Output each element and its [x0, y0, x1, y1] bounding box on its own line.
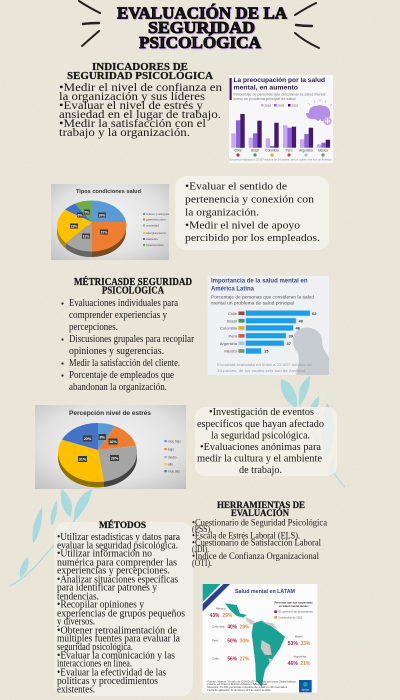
text block: indicadores: trabajo y la organización.	[59, 127, 190, 139]
methods list: tendencias.	[57, 591, 99, 602]
pie legend: muy alto	[168, 470, 180, 474]
country data: México	[216, 607, 226, 611]
horizontal bars	[246, 310, 310, 354]
country labels	[234, 148, 328, 152]
values	[264, 311, 317, 354]
methods list: •Recopilar opiniones y	[57, 600, 144, 611]
values: 49	[298, 318, 304, 323]
bars	[231, 114, 330, 148]
pie legend: reflexo y alergias	[146, 212, 170, 216]
methods list: para identificar patrones y	[57, 583, 157, 594]
methods list: •Evaluar la efectividad de las	[57, 667, 166, 678]
footnote	[217, 362, 313, 373]
panel: investigación y evaluaciones: medir la cultura y el ambiente	[197, 454, 322, 464]
country data: 29%	[240, 625, 250, 631]
chart title: Importancia de la salud mental en	[211, 278, 308, 284]
decorative brush rays, left	[79, 1, 100, 46]
bullet list: métricas: Medir la satisfacción del cliente.	[69, 358, 180, 369]
country labels: Chile	[234, 148, 242, 152]
pie chart: tipos condiciones salud	[51, 184, 170, 260]
chart subtitle: Porcentaje de personas que consideran la salud	[211, 295, 314, 300]
methods list: numérica para comprender las	[57, 557, 177, 568]
values: 15	[264, 348, 269, 354]
text block: indicadores: •Evaluar el nivel de estrés y	[59, 100, 203, 112]
text block: herramientas: •Índice de Confianza Organizacional	[192, 551, 319, 561]
pie legend: gastritis/colon	[146, 218, 166, 222]
map legend: Personas que han empeorado	[274, 601, 313, 605]
values: 46	[296, 326, 301, 331]
heading: métricas	[74, 276, 192, 296]
methods list: interacciones en línea.	[57, 659, 132, 670]
panel: métodos	[54, 519, 193, 696]
heading: herramientas de evaluación	[217, 501, 305, 519]
country data: 56%	[227, 656, 237, 662]
pie value labels: 6%	[78, 214, 82, 218]
chart footnote: Encuesta realizada a 23.507 adultos de 34 países, de los cuales seis son de América	[230, 158, 332, 162]
methods list: experiencias y percepciones.	[57, 566, 170, 577]
text block: herramientas	[192, 518, 327, 568]
pie chart: percepción nivel de estrés	[35, 405, 186, 489]
panel: sentido de pertenencia: •Evaluar el sentido de	[185, 182, 287, 192]
country labels: Argentina	[299, 148, 313, 152]
pie legend: alto	[168, 462, 173, 466]
bullet list: métricas: comprender experiencias y	[69, 310, 168, 321]
country data: Colombia	[212, 625, 225, 629]
methods list: •Evaluar la comunicación y las	[57, 651, 175, 662]
heading: herramientas de evaluación: HERRAMIENTAS DE	[217, 501, 305, 511]
country data: 40%	[227, 625, 237, 631]
methods list: •Obtener retroalimentación de	[57, 625, 178, 636]
bullet list: métricas: Evaluaciones individuales para	[69, 298, 178, 309]
bullet list: métricas: opiniones y sugerencias.	[69, 346, 164, 357]
pie title: Percepción nivel de estrés	[69, 410, 151, 417]
text block: herramientas: •Cuestionario de Satisfacción Laboral	[192, 537, 321, 547]
values: 37	[286, 341, 292, 346]
panel: sentido de pertenencia: •Medir el nivel de apoyo	[185, 220, 300, 232]
methods list: •Analizar situaciones específicas	[57, 574, 178, 585]
country labels: Argentina	[220, 341, 238, 346]
pie value labels: 20%	[84, 437, 92, 441]
text block: indicadores: •Medir el nivel de confianza en	[59, 82, 222, 94]
pie legend	[143, 212, 170, 247]
values: 62	[312, 311, 317, 316]
text block: herramientas: (PSS).	[192, 524, 212, 534]
pie value labels: 31%	[79, 458, 87, 462]
methods list	[57, 532, 185, 695]
country labels: Brasil	[227, 318, 237, 323]
values: 39	[288, 333, 294, 338]
heading: métodos: MÉTODOS	[99, 519, 146, 531]
country labels: Colombia	[220, 326, 238, 331]
map source note: Muestra: 21.011 personas mayores de edad en 30 mercados	[207, 686, 288, 689]
country labels	[220, 311, 238, 354]
chart: importancia de la salud mental	[208, 276, 329, 375]
country data	[210, 607, 311, 667]
country data: Perú	[212, 639, 219, 643]
text block: indicadores: ansiedad en el lugar de trabajo.	[59, 109, 221, 121]
panel: investigación y evaluaciones: •Investigación de eventos	[209, 407, 314, 418]
panel: sentido de pertenencia: pertenencia y conexión con	[185, 194, 315, 206]
text block: herramientas: •Escala de Estrés Laboral (ELS).	[192, 530, 300, 540]
title: PSICOLÓGICA	[139, 33, 262, 52]
chart title: América Latina	[211, 286, 255, 292]
pie legend	[164, 440, 181, 474]
country labels: México	[224, 348, 238, 354]
methods list: •Utilizar estadísticas y datos para	[57, 532, 181, 543]
bullet list: métricas: Porcentaje de empleados que	[69, 370, 174, 381]
text block: indicadores: la organización y sus líderes	[59, 91, 206, 103]
map legend: Comienzos de 2021	[278, 615, 303, 619]
chart title	[234, 78, 325, 92]
pie slices	[57, 200, 126, 252]
chart subtitle: como un problema principal de salud	[234, 97, 296, 101]
country data: Brasil	[295, 635, 303, 639]
pie legend: medio	[168, 456, 177, 460]
methods list: seguridad psicológica.	[57, 642, 133, 653]
country data: 30%	[240, 639, 250, 645]
footnote: Encuesta realizada en línea a 23.507 adultos de	[217, 362, 313, 367]
map source note: para el Foro Económico Mundial	[207, 683, 268, 686]
country data: 27%	[240, 656, 250, 662]
title: SEGURIDAD	[148, 18, 255, 37]
title: EVALUACIÓN DE LA	[117, 4, 288, 22]
pie value labels: 13%	[83, 234, 89, 238]
flags	[236, 153, 325, 157]
map legend: su salud mental desde:	[279, 604, 309, 608]
country data: 50%	[227, 639, 237, 645]
title	[117, 4, 288, 52]
decorative brush rays, right	[295, 3, 319, 48]
pie value labels: 26%	[111, 456, 119, 460]
chart title: mental, en aumento	[234, 86, 298, 92]
icon: brain	[306, 99, 332, 125]
methods list: experiencias de grupos pequeños	[57, 608, 185, 619]
bullet list: métricas	[61, 298, 194, 393]
methods list: políticas y procedimientos	[57, 676, 158, 687]
chart legend: 2020	[278, 104, 285, 108]
corner stripes	[203, 584, 230, 611]
pie value labels: 24%	[99, 214, 105, 218]
text block: indicadores: •Medir la satisfacción con el	[59, 118, 206, 130]
map source note: Fuente: Informe "Un año de COVID-19" realizado por Ipsos Global Advisor	[207, 681, 296, 684]
panel: investigación y evaluaciones: •Evaluaciones anónimas para	[200, 442, 321, 453]
map source note: Fecha de aplicación: 22 de febrero al 5 de marzo de 2021	[207, 689, 271, 692]
heading: indicadores: SEGURIDAD PSICOLÓGICA	[67, 70, 214, 82]
pie value labels	[70, 210, 108, 238]
silhouette	[293, 328, 329, 375]
pie depth	[58, 452, 137, 487]
panel: sentido de pertenencia: la organización.	[185, 208, 259, 218]
country labels: Chile	[228, 311, 238, 316]
chart subtitle	[234, 92, 326, 101]
country data: 33%	[300, 641, 311, 647]
pie legend: bajo	[168, 448, 174, 452]
country data: 29%	[222, 613, 233, 619]
chart subtitle: Porcentaje de personas que consideran la salud mental	[234, 92, 326, 96]
ipsos logo: Ipsos	[302, 688, 309, 692]
heading: métricas: PSICOLÓGICA	[102, 284, 165, 296]
methods list: •Utilizar información no	[57, 549, 152, 560]
heading: indicadores: INDICADORES DE	[92, 62, 188, 73]
chart subtitle: mental un problema de salud principal	[211, 301, 294, 306]
map shapes	[225, 603, 285, 687]
chart legend: 2022	[292, 104, 299, 108]
pie value labels	[78, 434, 119, 462]
bullet list: métricas: Discusiones grupales para recopilar	[69, 334, 194, 345]
map legend: El comienzo de la pandemia	[278, 610, 313, 614]
footnote: 34 países, de los cuales seis son de América	[217, 368, 306, 373]
pie legend: hipertensión	[146, 243, 164, 247]
panel: investigación y evaluaciones	[195, 407, 337, 476]
heading: herramientas de evaluación: EVALUACIÓN	[231, 507, 289, 519]
chart: la preocupación por la salud mental	[229, 75, 333, 163]
heading: indicadores	[67, 62, 214, 82]
country data: 21%	[300, 661, 311, 667]
pie value labels: 8%	[100, 436, 106, 440]
methods list: existentes.	[57, 684, 95, 695]
country data: 46%	[288, 661, 298, 667]
methods list: evaluar la seguridad psicológica.	[57, 540, 178, 551]
panel: sentido de pertenencia: percibido por los empleados.	[185, 233, 320, 244]
panel: investigación y evaluaciones: la seguridad psicológica.	[211, 431, 310, 442]
flags	[238, 312, 244, 353]
country labels: México	[318, 148, 328, 152]
chart title	[211, 278, 308, 292]
map source note	[207, 681, 296, 692]
pie value labels: 27%	[101, 230, 107, 234]
country data: 43%	[210, 613, 220, 619]
methods list: múltiples fuentes para evaluar la	[57, 634, 181, 645]
bullet list: métricas: percepciones.	[69, 322, 118, 333]
pie title: Tipos condiciones salud	[76, 189, 142, 195]
pie value labels: 16%	[109, 440, 117, 444]
map title: Salud mental en LATAM	[235, 589, 295, 595]
chart title: La preocupación por la salud	[234, 78, 325, 84]
country data: Argentina	[293, 655, 306, 659]
pie slices	[58, 423, 137, 482]
pie value labels: 23%	[71, 224, 77, 228]
map: salud mental en LATAM	[203, 584, 317, 693]
country labels: Perú	[286, 148, 293, 152]
country labels: Colombia	[265, 148, 279, 152]
panel: sentido de pertenencia	[175, 176, 329, 250]
pie legend: muy bajo	[168, 440, 181, 444]
chart legend: 2018	[264, 104, 272, 108]
chart legend	[261, 104, 299, 108]
bullet list: métricas: abandonan la organización.	[69, 382, 167, 393]
panel: investigación y evaluaciones: de trabajo.	[239, 465, 282, 476]
methods list: y diversos.	[57, 617, 95, 628]
heading: métricas: MÉTRICASDE SEGURIDAD	[74, 276, 192, 288]
decorative leaves, right branch	[281, 376, 345, 487]
pie legend: alergias/acné	[146, 231, 166, 235]
pie depth	[57, 226, 126, 257]
chart subtitle	[211, 295, 314, 306]
country labels: Perú	[229, 333, 237, 338]
text block: herramientas: (OTI).	[192, 558, 212, 568]
text block: herramientas: •Cuestionario de Seguridad Psicológica	[192, 518, 327, 528]
pie legend: diabetes	[146, 237, 159, 241]
decorative leaves, left branch	[10, 489, 92, 586]
map legend	[274, 601, 313, 619]
panel: investigación y evaluaciones: específicos que hayan afectado	[197, 419, 324, 430]
country data: 53%	[288, 641, 298, 647]
pie value labels: 9%	[85, 210, 89, 214]
pie legend: ansiedad	[146, 224, 159, 228]
country data: Chile	[212, 656, 219, 660]
country labels: Brasil	[251, 148, 259, 152]
text block: indicadores	[59, 82, 222, 139]
text block: herramientas: (JDI).	[192, 544, 209, 554]
